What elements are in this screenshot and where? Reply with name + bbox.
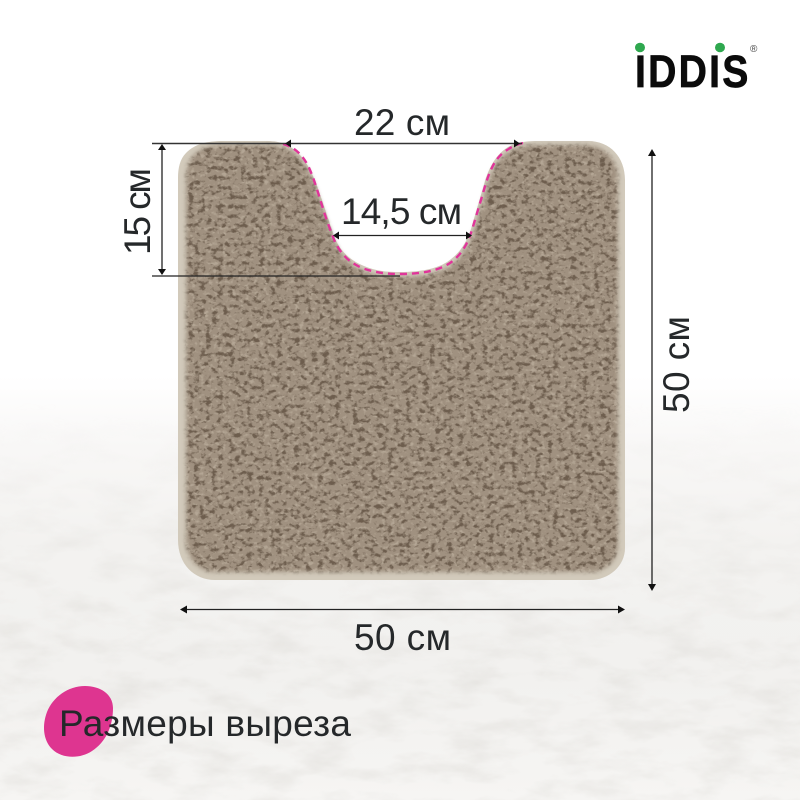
dimension: 22 cm cut-out width: 22 см: [354, 102, 450, 143]
mat edge binding: [178, 141, 625, 580]
logo: IDDIS: ®: [750, 44, 758, 55]
dimension: 22 cm cut-out width: [152, 102, 522, 148]
dimension: 50 cm width: 50 см: [354, 617, 451, 658]
bath mat with U-shaped cut-out: [178, 140, 628, 580]
logo: IDDIS: IDDIS: [635, 46, 751, 97]
dimension: 15 cm cut-out depth: 15 см: [117, 168, 158, 255]
dimension: 14,5 cm cut-out inner width: 14,5 см: [341, 191, 462, 232]
dimension: 50 cm width: [180, 606, 625, 658]
dimension: 50 cm height: 50 см: [656, 316, 697, 413]
caption marker: magenta blob: [44, 686, 113, 757]
caption: cut-out dimensions: Размеры выреза: [59, 703, 351, 744]
dimension: 15 cm cut-out depth: [117, 144, 400, 276]
background: white fur fading in: [0, 426, 800, 800]
caption: cut-out dimensions: [44, 686, 351, 757]
cut-out outline: magenta dashes: [283, 143, 523, 274]
mat pile: [178, 140, 628, 580]
dimension: 50 cm height: [648, 149, 697, 591]
